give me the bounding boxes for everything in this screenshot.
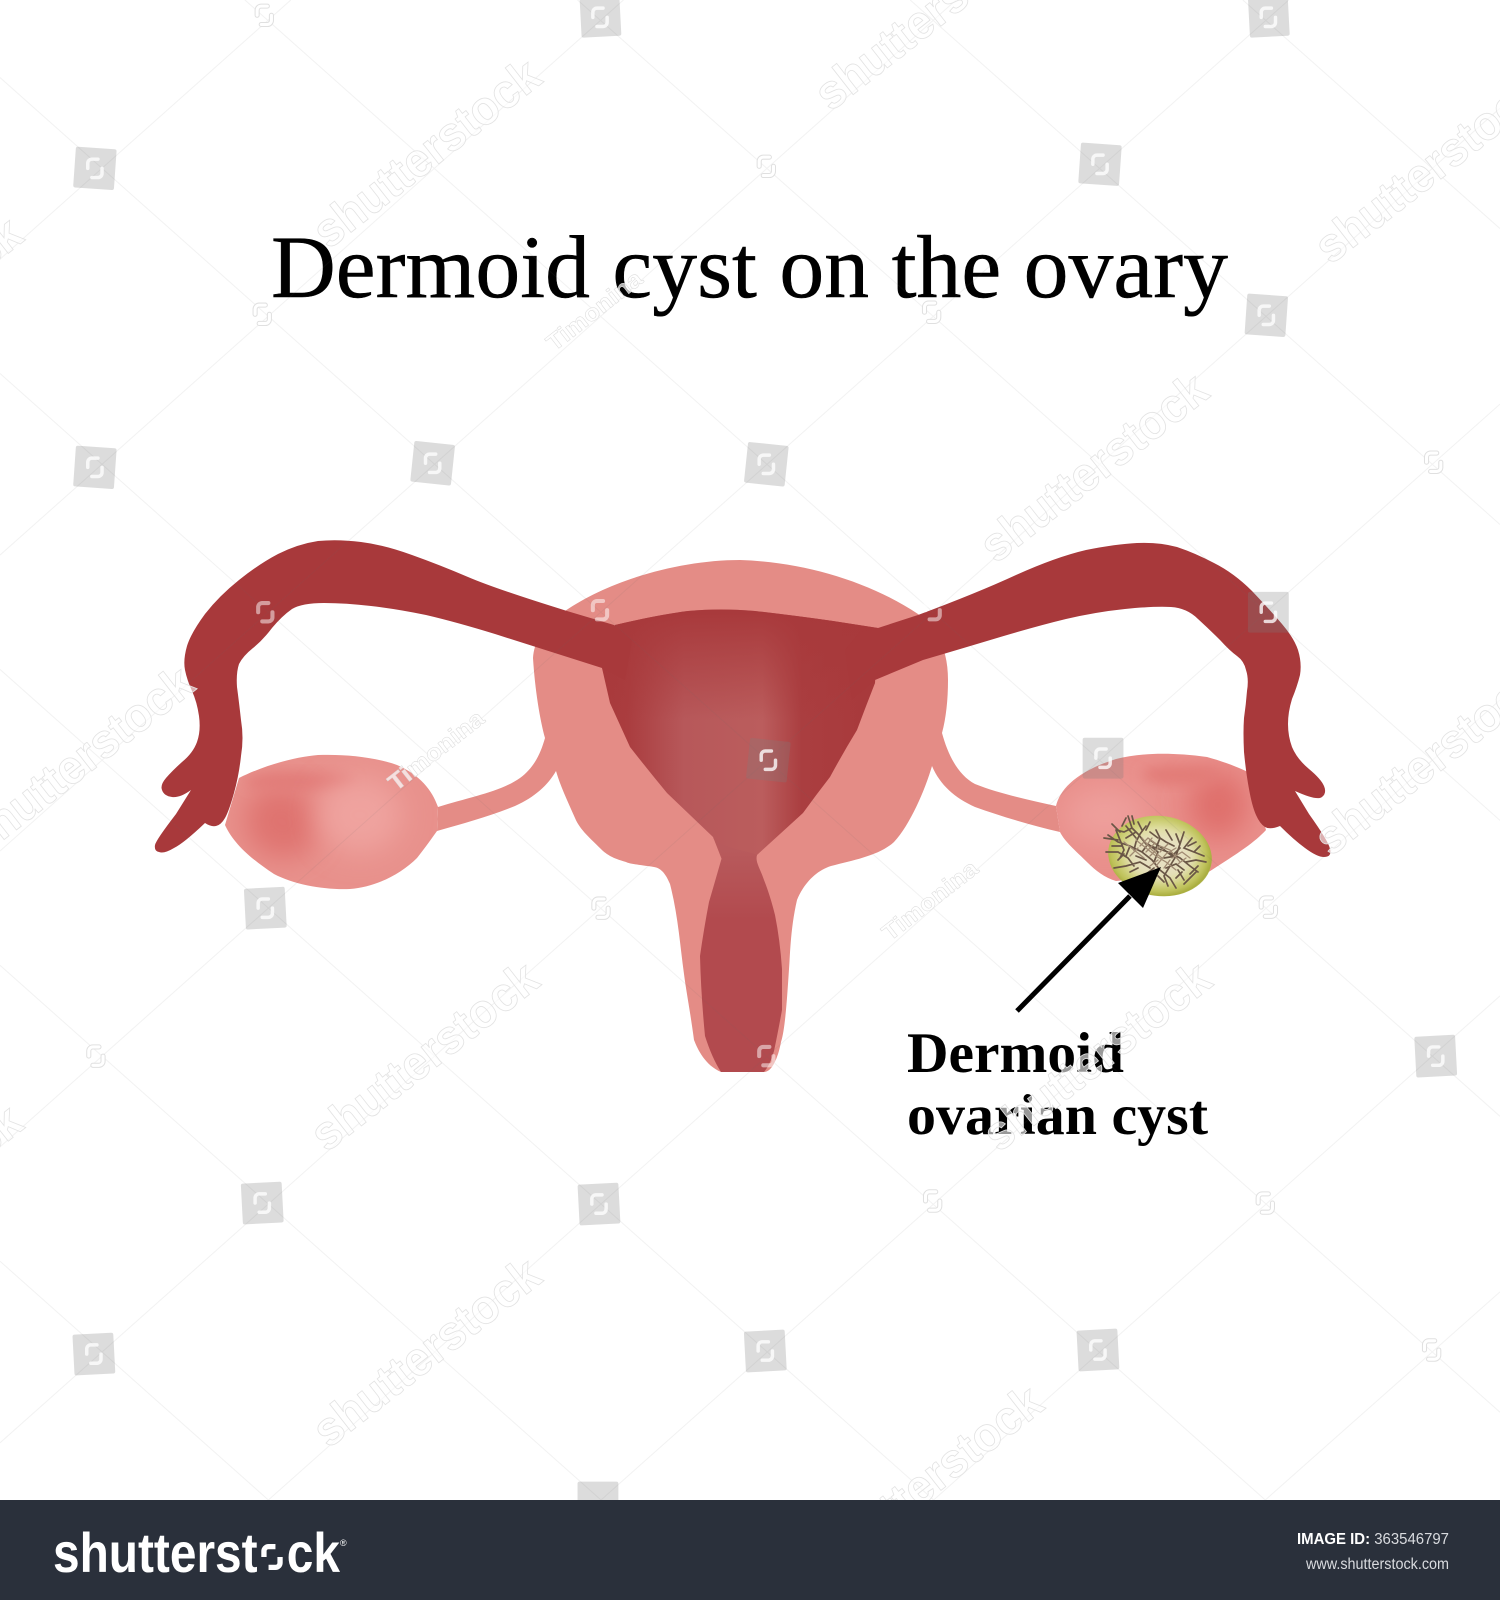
title: Dermoid cyst on the ovary [271, 218, 1228, 317]
right ovary [1056, 754, 1266, 881]
watermark logo marks [87, 8, 1443, 1363]
left ovary [225, 754, 438, 890]
diagonal shutterstock watermark words: shutterstock [970, 363, 1218, 573]
right fallopian tube [845, 543, 1330, 857]
diagonal shutterstock watermark words: shutterstock [805, 1375, 1053, 1585]
website: www.shutterstock.com [1305, 1556, 1449, 1573]
logo marks over the organs [258, 601, 940, 1065]
dermoid cyst [1103, 809, 1217, 903]
registered mark: ® [340, 1538, 347, 1548]
image id: IMAGE ID: 363546797 [1297, 1531, 1449, 1548]
Timonina watermark words [383, 264, 984, 946]
Timonina watermark words: Timonina [541, 264, 648, 356]
uterine cavity and cervix [602, 610, 878, 1072]
cyst label [907, 1022, 1208, 1147]
Timonina watermark words: Timonina [877, 854, 984, 946]
diagonal shutterstock watermark words: shutterstock [973, 951, 1221, 1162]
small outlined logo marks [89, 6, 1441, 1359]
cyst label: Dermoid [907, 1022, 1124, 1085]
uterus outer body with ligaments [437, 560, 1060, 1072]
diagonal shutterstock watermark words: shutterstock [303, 1247, 551, 1458]
logo bracket mark [264, 1547, 280, 1567]
arrow pointing to cyst [1017, 867, 1161, 1011]
anatomy diagram [155, 540, 1330, 1072]
cyst label: ovarian cyst [907, 1084, 1208, 1147]
diagonal shutterstock watermark words: shutterstock [301, 951, 549, 1162]
Timonina watermark words: Timonina [383, 704, 490, 796]
shutterstock logo: shutterstock [53, 1521, 341, 1584]
left fallopian tube [155, 540, 632, 852]
diagonal shutterstock watermark words: shutterstock [303, 48, 551, 259]
footer bar [0, 1500, 1500, 1600]
